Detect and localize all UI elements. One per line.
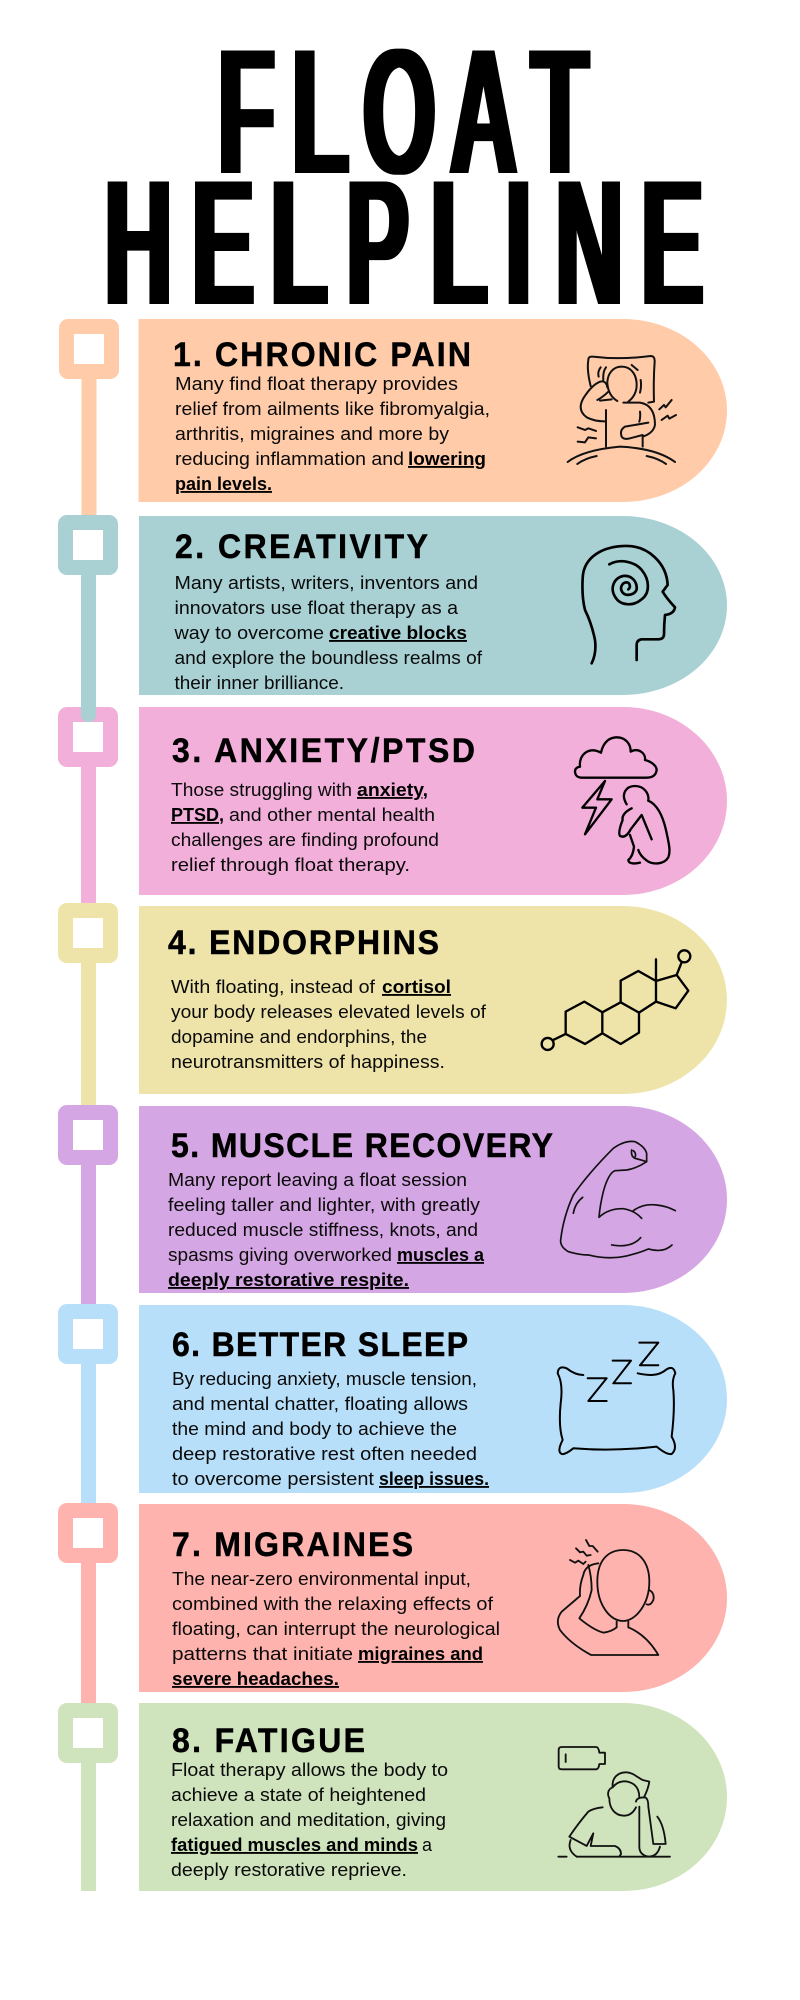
text block: endorphins: neurotransmitters of happiness. — [171, 1051, 445, 1072]
heading: chronic pain: 1. CHRONIC PAIN — [173, 335, 471, 373]
timeline node 4 — [58, 903, 118, 1110]
text block: endorphins — [171, 976, 487, 1072]
text block: better sleep: to overcome persistent — [172, 1468, 374, 1489]
text block: muscle recovery: Many report leaving a float session — [168, 1169, 467, 1190]
text block: anxiety/PTSD: and other mental health — [229, 804, 435, 825]
text block: better sleep: deep restorative rest often needed — [172, 1443, 477, 1464]
text block: creativity: and explore the boundless realms of — [174, 647, 483, 668]
text block: muscle recovery — [168, 1169, 485, 1290]
text block: better sleep: By reducing anxiety, muscle tension, — [172, 1368, 477, 1389]
text block: migraines — [172, 1568, 500, 1689]
panel: muscle recovery — [139, 1106, 727, 1293]
heading: better sleep: 6. BETTER SLEEP — [172, 1325, 468, 1363]
text block: migraines: The near-zero environmental input, — [172, 1568, 471, 1589]
icon: head with spiral — [582, 546, 675, 663]
text block: better sleep — [172, 1368, 489, 1489]
text block: creativity: creative blocks — [329, 622, 467, 643]
heading: anxiety/PTSD: 3. ANXIETY/PTSD — [172, 731, 475, 769]
timeline node 2 — [58, 515, 118, 722]
text block: endorphins: cortisol — [382, 976, 451, 997]
text block: migraines: patterns that initiate — [172, 1643, 353, 1664]
icon: person holding head — [558, 1540, 658, 1655]
text block: chronic pain: arthritis, migraines and more by — [175, 423, 450, 444]
heading: fatigue: 8. FATIGUE — [172, 1721, 365, 1759]
text block: muscle recovery: feeling taller and lighter, with greatly — [168, 1194, 481, 1215]
text block: migraines: combined with the relaxing effects of — [172, 1593, 494, 1614]
text block: fatigue: relaxation and meditation, giving — [171, 1809, 446, 1830]
text block: endorphins: dopamine and endorphins, the — [171, 1026, 427, 1047]
icon: pillow with Zzz — [558, 1343, 675, 1454]
text block: fatigue: fatigued muscles and minds — [171, 1834, 418, 1855]
panel: fatigue — [139, 1703, 727, 1891]
text block: creativity: way to overcome — [173, 622, 324, 643]
text block: anxiety/PTSD: PTSD, — [171, 804, 224, 825]
text block: anxiety/PTSD: Those struggling with — [171, 779, 352, 800]
timeline node 3 — [58, 707, 118, 910]
heading: muscle recovery: 5. MUSCLE RECOVERY — [171, 1126, 553, 1164]
icon: tired person with low battery — [558, 1747, 670, 1857]
text block: creativity: Many artists, writers, inventors and — [174, 572, 478, 593]
panel: creativity — [139, 516, 727, 695]
text block: fatigue: deeply restorative reprieve. — [171, 1859, 407, 1880]
panel: better sleep — [139, 1305, 727, 1493]
text block: chronic pain: reducing inflammation and — [175, 448, 404, 469]
text block: chronic pain: Many find float therapy provides — [175, 373, 458, 394]
timeline node 8 — [58, 1703, 118, 1891]
text block: chronic pain — [175, 373, 490, 494]
timeline: stems and nodes — [58, 319, 119, 1891]
panel: migraines — [139, 1504, 727, 1692]
text block: muscle recovery: muscles a — [397, 1244, 485, 1265]
text block: anxiety/PTSD — [171, 779, 439, 875]
text block: migraines: migraines and — [358, 1643, 483, 1664]
text block: fatigue: achieve a state of heightened — [171, 1784, 426, 1805]
title: HELPLINE — [104, 141, 704, 344]
text block: better sleep: sleep issues. — [379, 1468, 489, 1489]
text block: anxiety/PTSD: anxiety, — [357, 779, 428, 800]
text block: fatigue: a — [422, 1834, 433, 1855]
heading: endorphins: 4. ENDORPHINS — [168, 923, 439, 961]
timeline node 5 — [58, 1105, 118, 1310]
timeline node 1 — [59, 319, 119, 520]
text block: creativity: innovators use float therapy as a — [174, 597, 459, 618]
panel: endorphins — [139, 906, 727, 1094]
icon: storm cloud over curled-up person — [575, 737, 669, 863]
text block: migraines: severe headaches. — [172, 1668, 339, 1689]
text block: creativity: their inner brilliance. — [174, 672, 344, 693]
text block: anxiety/PTSD: challenges are finding profound — [171, 829, 439, 850]
title — [104, 10, 704, 344]
title: FLOAT — [218, 10, 589, 213]
icon: flexed arm — [561, 1141, 675, 1258]
text block: better sleep: the mind and body to achieve the — [172, 1418, 457, 1439]
text block: endorphins: With floating, instead of — [171, 976, 376, 997]
icon: steroid molecule — [542, 950, 690, 1050]
panel: anxiety/PTSD — [139, 707, 727, 895]
timeline node 6 — [58, 1304, 118, 1510]
panel: chronic pain — [138, 319, 727, 502]
text block: fatigue — [171, 1759, 448, 1880]
text block: muscle recovery: reduced muscle stiffness, knots, and — [168, 1219, 478, 1240]
text block: anxiety/PTSD: relief through float therapy. — [171, 854, 410, 875]
text block: muscle recovery: spasms giving overworked — [168, 1244, 392, 1265]
text block: endorphins: your body releases elevated levels of — [171, 1001, 487, 1022]
heading: migraines: 7. MIGRAINES — [172, 1525, 413, 1563]
heading: creativity: 2. CREATIVITY — [175, 527, 428, 565]
text block: better sleep: and mental chatter, floating allows — [172, 1393, 468, 1414]
text block: fatigue: Float therapy allows the body to — [171, 1759, 448, 1780]
text block: migraines: floating, can interrupt the neurological — [172, 1618, 500, 1639]
text block: creativity — [173, 572, 483, 693]
text block: muscle recovery: deeply restorative respite. — [168, 1269, 409, 1290]
timeline node 7 — [58, 1503, 118, 1710]
text block: chronic pain: pain levels. — [175, 473, 272, 494]
icon: person in bed with back pain — [568, 356, 676, 464]
text block: chronic pain: lowering — [408, 448, 486, 469]
text block: chronic pain: relief from ailments like fibromyalgia, — [175, 398, 490, 419]
